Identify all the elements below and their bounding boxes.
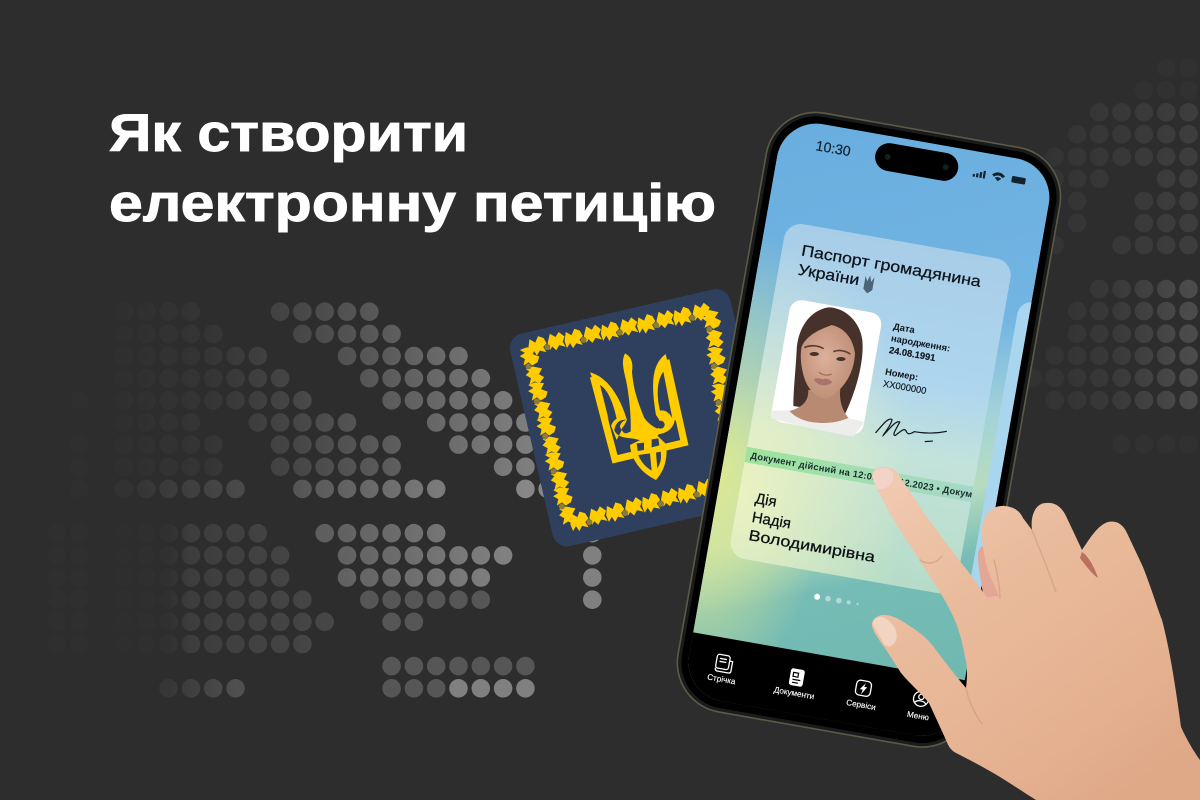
wreath border	[518, 302, 733, 533]
white shirt	[771, 410, 864, 437]
title	[109, 104, 716, 233]
card title: України	[797, 262, 861, 289]
personal data: XX000000	[882, 378, 927, 396]
personal data: Номер:	[884, 366, 919, 382]
status time: 10:30	[815, 137, 852, 159]
bottom navigation bar	[688, 632, 965, 736]
icon: feed	[715, 654, 733, 673]
portrait of the document holder	[771, 307, 864, 437]
personal data: 24.08.1991	[888, 344, 936, 363]
holder name: Надія	[750, 509, 792, 532]
finger shading	[920, 530, 1056, 724]
thumb nail	[873, 617, 897, 646]
trident	[590, 353, 684, 480]
dynamic island	[873, 141, 960, 183]
hand pointing at phone	[872, 467, 1200, 800]
title: електронну петицію	[109, 174, 716, 233]
card base	[507, 286, 776, 549]
nose and lips	[814, 372, 832, 385]
validity band: Документ дійсний на 12:00 | 20.12.2023 • Докум	[750, 451, 973, 500]
holder name: Володимирівна	[747, 527, 877, 566]
title: Як створити	[109, 104, 468, 163]
phone	[676, 112, 1062, 748]
card title: Паспорт громадянина	[800, 242, 983, 291]
signature	[875, 418, 947, 442]
gap between ring finger and pinky	[1080, 552, 1098, 578]
personal data	[882, 323, 950, 394]
status icons	[972, 168, 1026, 186]
nav labels	[706, 673, 930, 722]
emblem card with trident	[507, 286, 776, 549]
nav labels: Стрічка	[706, 673, 737, 686]
next card	[971, 302, 1032, 589]
face	[801, 325, 855, 398]
holder name: Дія	[754, 490, 778, 511]
pagination dots	[814, 594, 859, 606]
neck	[788, 388, 849, 423]
dotted world map: left	[57, 312, 593, 688]
small trident	[863, 276, 874, 294]
portrait photo card	[770, 298, 883, 437]
back fingertip	[978, 546, 1004, 600]
icon: services	[855, 680, 872, 697]
index fingernail	[873, 468, 894, 489]
hand silhouette	[872, 467, 1200, 800]
personal data: Дата	[892, 320, 916, 335]
nav labels: Сервіси	[846, 698, 877, 712]
document card	[728, 221, 1014, 596]
personal data: народження:	[890, 332, 951, 354]
brows and eyes	[804, 346, 850, 361]
icon: menu	[912, 691, 928, 707]
hair	[793, 307, 863, 414]
icon: documents	[788, 668, 805, 687]
nav labels: Документи	[773, 685, 815, 701]
nav labels: Меню	[906, 710, 930, 722]
holder name	[749, 493, 874, 562]
phone body	[669, 104, 1068, 755]
phone screen	[688, 124, 1050, 736]
dotted world map: right	[1032, 68, 1189, 444]
